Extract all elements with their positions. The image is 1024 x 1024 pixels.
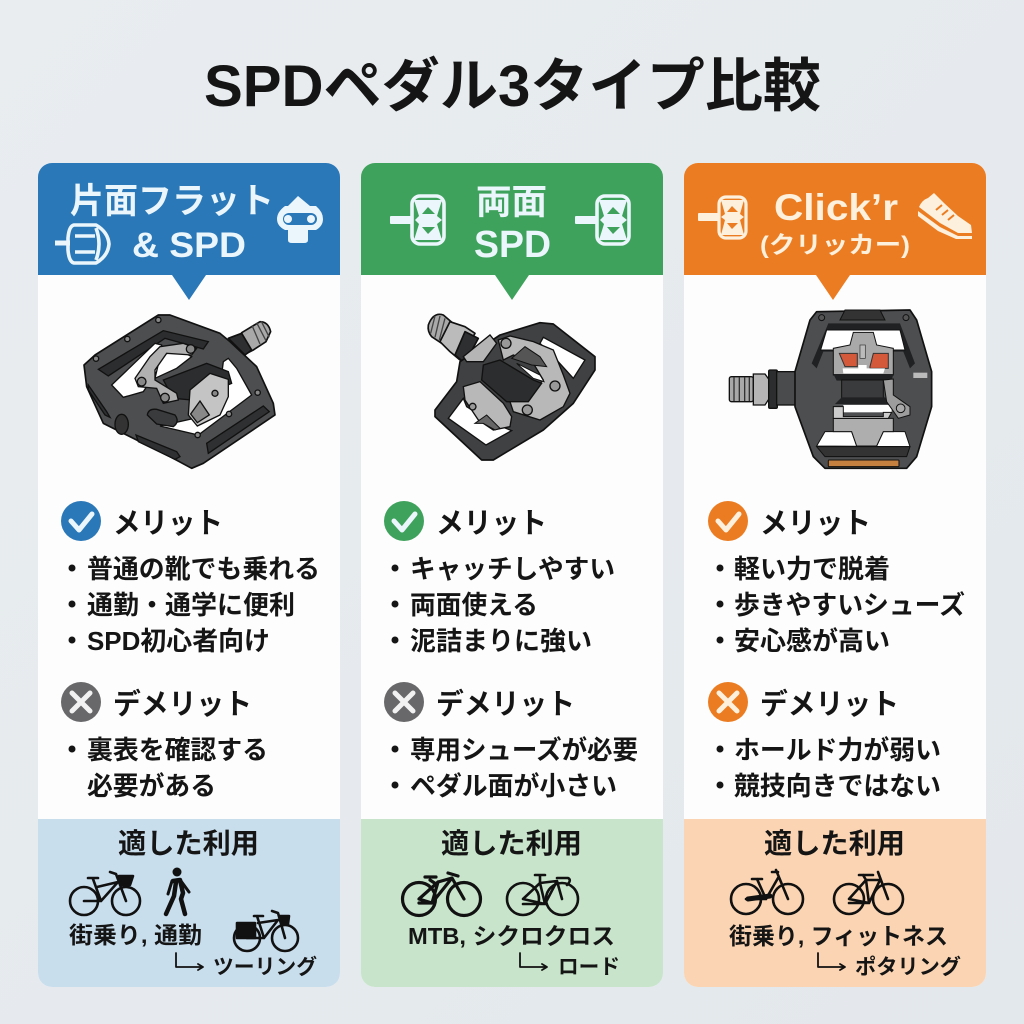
demerit heading bbox=[61, 682, 252, 722]
demerit list bbox=[716, 735, 941, 801]
suitable use panel: orange: ポタリング bbox=[855, 955, 961, 979]
icon: fitness bike bbox=[834, 872, 903, 914]
merit heading: メリット bbox=[436, 508, 547, 540]
arrow bbox=[520, 953, 547, 970]
panel header: orange: (クリッカー) bbox=[760, 232, 910, 259]
merit list: 歩きやすいシューズ bbox=[734, 590, 965, 620]
merit list: キャッチしやすい bbox=[410, 554, 615, 584]
icon: SPD pedal left bbox=[390, 196, 444, 244]
icon: step-through bike bbox=[731, 870, 803, 914]
suitable use panel: orange bbox=[684, 819, 986, 987]
merit heading: メリット bbox=[760, 508, 871, 540]
demerit list: 裏表を確認する bbox=[87, 735, 268, 765]
merit heading: メリット bbox=[113, 508, 223, 540]
demerit list: 競技向きではない bbox=[734, 771, 941, 801]
panel header: green: 両面 bbox=[476, 183, 547, 222]
icon: road bike bbox=[507, 875, 578, 915]
suitable use panel: blue: 街乗り, 通勤 bbox=[69, 922, 202, 948]
demerit heading: デメリット bbox=[113, 687, 252, 721]
demerit list bbox=[68, 735, 268, 801]
suitable use panel: blue bbox=[38, 819, 340, 987]
suitable use panel: orange: 適した利用 bbox=[764, 828, 905, 859]
panel header: blue: & SPD bbox=[132, 226, 246, 265]
suitable use panel: orange: 街乗り, フィットネス bbox=[729, 923, 948, 949]
demerit heading bbox=[708, 682, 899, 722]
icon: city bike with basket bbox=[70, 872, 140, 915]
merit list: 泥詰まりに強い bbox=[410, 626, 592, 656]
icon: flat pedal outline bbox=[55, 225, 109, 263]
suitable use panel: green bbox=[361, 819, 663, 987]
merit list: 安心感が高い bbox=[734, 626, 890, 656]
pedal illustration 3 bbox=[729, 310, 932, 468]
merit heading bbox=[708, 501, 871, 541]
merit heading bbox=[61, 501, 223, 541]
merit list bbox=[716, 554, 965, 656]
panel header: orange: Click’r bbox=[774, 187, 898, 228]
suitable use panel: blue: ツーリング bbox=[213, 955, 317, 979]
pedal illustration 1 bbox=[84, 315, 275, 468]
title: SPDペダル3タイプ比較 bbox=[204, 54, 821, 119]
merit list: 普通の靴でも乗れる bbox=[87, 554, 320, 584]
merit list: 両面使える bbox=[410, 590, 538, 620]
suitable use panel: green: 適した利用 bbox=[441, 828, 582, 859]
arrow bbox=[818, 953, 845, 970]
demerit list: ペダル面が小さい bbox=[410, 771, 617, 801]
icon: shoe bbox=[918, 193, 972, 239]
demerit list bbox=[392, 735, 638, 801]
demerit heading: デメリット bbox=[760, 687, 899, 721]
pedal illustration 2 bbox=[428, 314, 595, 460]
panel header: blue: 片面フラット bbox=[70, 182, 274, 221]
merit list bbox=[392, 554, 615, 656]
demerit list: 必要がある bbox=[87, 771, 216, 801]
merit heading bbox=[384, 501, 547, 541]
demerit heading: デメリット bbox=[436, 687, 575, 721]
panel header: blue bbox=[38, 163, 340, 300]
panel: single-sided flat and SPD bbox=[38, 163, 340, 987]
demerit list: ホールド力が弱い bbox=[734, 735, 941, 765]
panel: double-sided SPD bbox=[361, 163, 663, 987]
merit list bbox=[68, 554, 320, 656]
icon: touring bike with panniers bbox=[234, 911, 298, 951]
icon: walking person bbox=[166, 868, 189, 914]
suitable use panel: green: MTB, シクロクロス bbox=[408, 923, 615, 949]
demerit list: 専用シューズが必要 bbox=[410, 735, 638, 765]
icon: Click'r pedal bbox=[698, 197, 746, 238]
demerit heading bbox=[384, 682, 575, 722]
merit list: 通勤・通学に便利 bbox=[87, 590, 295, 620]
icon: SPD pedal right bbox=[575, 196, 629, 244]
suitable use panel: green: ロード bbox=[558, 956, 620, 979]
icon: SPD cleat bbox=[277, 196, 323, 243]
icon: mountain bike bbox=[402, 873, 480, 916]
panel header: orange bbox=[684, 163, 986, 300]
panel header: green: SPD bbox=[474, 224, 551, 266]
arrow bbox=[176, 953, 203, 970]
merit list: SPD初心者向け bbox=[87, 626, 270, 656]
merit list: 軽い力で脱着 bbox=[734, 554, 890, 584]
suitable use panel: blue: 適した利用 bbox=[118, 828, 259, 859]
panel: Click'r bbox=[684, 163, 986, 987]
panel header: green bbox=[361, 163, 663, 300]
